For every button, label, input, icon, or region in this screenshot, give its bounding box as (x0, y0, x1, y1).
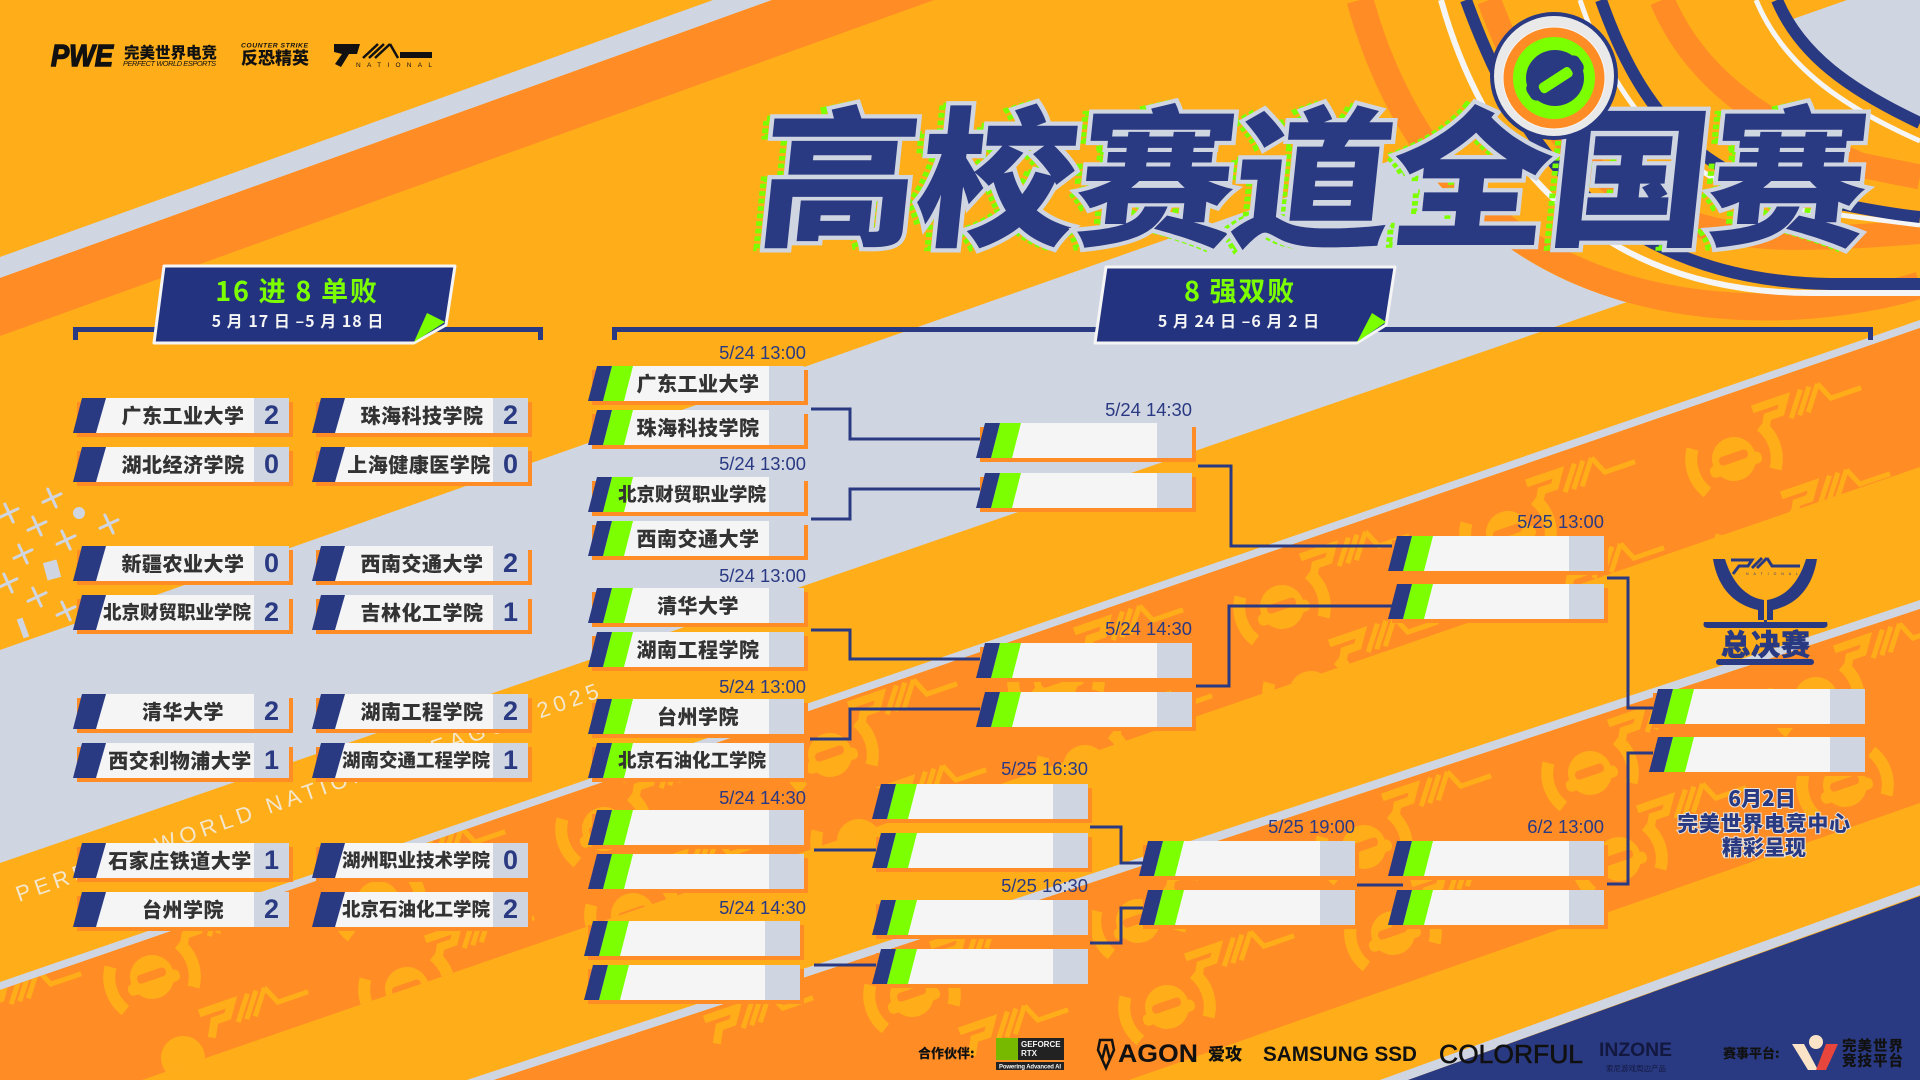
team slot (588, 810, 804, 849)
match card: 0 (503, 845, 518, 875)
match card: 2 (503, 894, 518, 924)
date label: 5/24 14:30 (1105, 399, 1192, 420)
brand logos (50, 38, 432, 73)
match card (73, 694, 293, 733)
banner: 16 进 8 单败 (154, 266, 455, 343)
logo: platform: 竞技平台 (1842, 1050, 1904, 1071)
match card: 新疆农业大学 (122, 548, 244, 577)
logo: geforce rtx: GEFORCE (1021, 1040, 1061, 1049)
label: platform: 赛事平台: (1723, 1043, 1780, 1062)
team slot (588, 477, 808, 516)
title: 高校赛道全国赛: 高校赛道全国赛 (741, 59, 1873, 277)
logo: inzone: INZONE (1599, 1040, 1672, 1061)
match card (312, 843, 528, 882)
match card: 上海健康医学院 (347, 449, 491, 478)
logo: agon (1098, 1040, 1242, 1068)
match card (312, 743, 532, 782)
team slot (588, 699, 808, 738)
match card: 北京财贸职业学院 (103, 599, 251, 625)
match card: 湖北经济学院 (122, 449, 244, 478)
logo: colorful: COLORFUL (1439, 1039, 1583, 1069)
match card (312, 546, 532, 585)
match card: 石家庄铁道大学 (108, 845, 252, 874)
match card: 湖州职业技术学院 (342, 847, 490, 873)
team slot (1388, 841, 1608, 880)
caption: final venue (1677, 783, 1851, 862)
match card (73, 398, 293, 437)
logo: counter strike: COUNTER STRIKE (241, 42, 308, 50)
team slot: 台州学院 (657, 701, 739, 730)
caption: final venue: 完美世界电竞中心 (1677, 808, 1851, 838)
match card: 西南交通大学 (360, 548, 484, 577)
heading: 总决赛: 总决赛 (1721, 622, 1811, 664)
match card: 0 (264, 449, 279, 479)
logo: samsung ssd: SAMSUNG SSD (1263, 1043, 1417, 1066)
final slot (1649, 737, 1869, 776)
logo: perfect world esports: PERFECT WORLD ESPORTS (123, 59, 216, 68)
logo: inzone: 索尼游戏周边产品 (1606, 1063, 1666, 1074)
team slot (872, 900, 1092, 939)
match card: 2 (503, 400, 518, 430)
match card: 2 (503, 548, 518, 578)
match card: 2 (264, 894, 279, 924)
date label: 5/24 14:30 (719, 897, 806, 918)
team slot (976, 692, 1196, 731)
logo: perfect world esports: PWE (51, 38, 114, 73)
match card (73, 843, 293, 882)
label: partners: 合作伙伴: (918, 1043, 975, 1062)
logo: perfect world esports (51, 38, 217, 73)
match card (73, 595, 293, 634)
match card: 1 (264, 845, 279, 875)
background stripes and pattern: PERFECT WORLD NATIONAL LEAGUE 2025 (12, 677, 606, 907)
date label: 5/25 19:00 (1268, 816, 1355, 837)
match card: 2 (264, 597, 279, 627)
match card: 1 (503, 745, 518, 775)
match card: 2 (264, 696, 279, 726)
team slot (588, 632, 808, 671)
final slot (1649, 689, 1865, 728)
title with medal (741, 12, 1881, 277)
match card: 湖南工程学院 (360, 696, 484, 725)
icon: trophy: NATIONAL (1746, 572, 1798, 576)
team slot: 广东工业大学 (636, 368, 760, 397)
match card: 吉林化工学院 (360, 597, 484, 626)
team slot (584, 965, 804, 1004)
team slot (872, 833, 1092, 872)
logo: agon: 爱攻 (1208, 1040, 1242, 1065)
logo: platform (1792, 1035, 1904, 1071)
date label: 5/25 16:30 (1001, 758, 1088, 779)
section brackets and banners (73, 264, 1873, 344)
icon: trophy (1704, 558, 1828, 628)
team slot: 湖南工程学院 (636, 634, 760, 663)
logo: geforce rtx: RTX (1021, 1049, 1038, 1058)
match card: 西交利物浦大学 (108, 745, 252, 774)
caption: final venue: 6月2日 (1728, 783, 1796, 813)
panel: 16 to 8 results (73, 398, 532, 931)
match card (73, 546, 293, 585)
match card (312, 892, 532, 931)
date label: 5/24 14:30 (1105, 618, 1192, 639)
logo: platform: 完美世界 (1842, 1035, 1904, 1056)
match card: 北京石油化工学院 (342, 896, 490, 922)
caption: final venue: 精彩呈现 (1722, 832, 1806, 862)
logo: pwl national: NATIONAL (356, 62, 432, 69)
match card: 1 (264, 745, 279, 775)
date label: 5/24 14:30 (719, 787, 806, 808)
match card: 1 (503, 597, 518, 627)
logo: geforce rtx: Powering Advanced AI (999, 1064, 1061, 1070)
medal icon (1490, 12, 1618, 140)
match card (73, 892, 289, 931)
match card (73, 447, 293, 486)
team slot: 珠海科技学院 (636, 412, 760, 441)
team slot (588, 366, 808, 405)
banner: 8 强双败: 8 强双败 (1184, 270, 1296, 309)
match card: 2 (264, 400, 279, 430)
team slot (1139, 890, 1358, 929)
match card (312, 595, 532, 634)
match card: 台州学院 (142, 894, 224, 923)
match card (312, 694, 532, 733)
match card (312, 447, 532, 486)
team slot (1388, 584, 1608, 623)
match card: 清华大学 (142, 696, 224, 725)
date label: 5/24 13:00 (719, 453, 806, 474)
team slot (976, 643, 1192, 682)
team slot: 清华大学 (657, 590, 739, 619)
logo: inzone (1599, 1040, 1672, 1074)
team slot: 西南交通大学 (636, 523, 760, 552)
team slot (1388, 890, 1608, 929)
team slot (588, 521, 808, 560)
logo: geforce rtx (996, 1038, 1064, 1070)
banner: 16 进 8 单败: 5 月 17 日 –5 月 18 日 (212, 308, 384, 332)
team slot (976, 473, 1196, 512)
date label: 5/24 13:00 (719, 676, 806, 697)
panel: double elimination bracket (584, 342, 1869, 1004)
logo: agon: AGON (1118, 1040, 1198, 1068)
match card (312, 398, 532, 437)
team slot (584, 921, 804, 960)
banner: 16 进 8 单败: 16 进 8 单败 (215, 270, 379, 309)
banner: 8 强双败: 5 月 24 日 –6 月 2 日 (1158, 308, 1320, 332)
team slot (588, 588, 808, 627)
team slot (976, 423, 1196, 462)
team slot: 北京石油化工学院 (618, 747, 766, 773)
team slot (588, 410, 808, 449)
match card: 湖南交通工程学院 (342, 747, 490, 773)
match card: 2 (503, 696, 518, 726)
match card: 0 (264, 548, 279, 578)
team slot (1388, 536, 1608, 575)
date label: 5/25 13:00 (1517, 511, 1604, 532)
team slot (1139, 841, 1359, 880)
team slot: 北京财贸职业学院 (618, 481, 766, 507)
logo: pwl national (334, 44, 432, 69)
team slot (588, 854, 808, 893)
date label: 6/2 13:00 (1527, 816, 1604, 837)
team slot (872, 949, 1088, 988)
banner: 8 强双败 (1095, 267, 1395, 343)
match card: 广东工业大学 (122, 400, 244, 429)
match card: 0 (503, 449, 518, 479)
logo: counter strike: 反恐精英 (241, 44, 309, 69)
title: 高校赛道全国赛: 高校赛道全国赛 (749, 59, 1881, 277)
date label: 5/24 13:00 (719, 342, 806, 363)
date label: 5/24 13:00 (719, 565, 806, 586)
team slot (588, 743, 808, 782)
date label: 5/25 16:30 (1001, 875, 1088, 896)
match card (73, 743, 293, 782)
team slot (872, 784, 1092, 823)
logo: perfect world esports: 完美世界电竞 (124, 41, 217, 63)
match card: 珠海科技学院 (360, 400, 484, 429)
